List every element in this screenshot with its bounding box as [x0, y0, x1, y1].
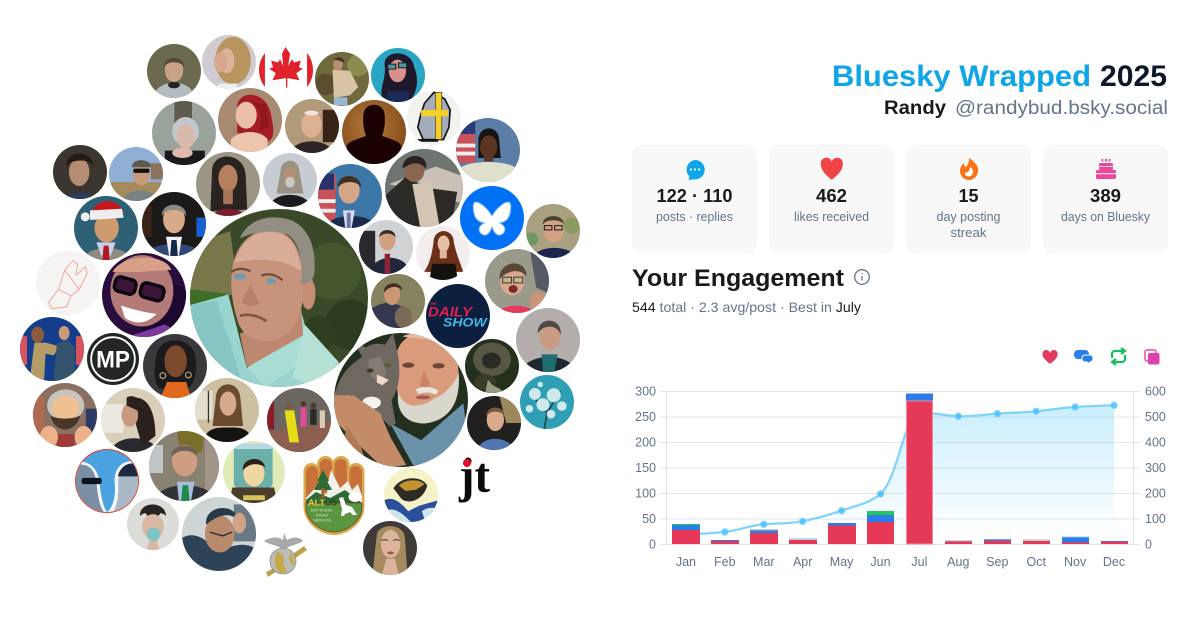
avatar: bald man: [285, 99, 339, 153]
stat card: likes received: [769, 145, 894, 253]
avatar: woman with auburn hair: [416, 226, 470, 280]
left axis labels: 50: [642, 512, 656, 526]
icon: Marine Corps emblem: [264, 533, 307, 577]
right axis labels: 300: [1145, 461, 1166, 475]
month labels: [676, 555, 1125, 569]
avatar: man in dark photo: [53, 145, 107, 199]
stacked bars: [672, 394, 1128, 544]
icon: info: [855, 270, 869, 284]
avatar: man in blue shirt: [467, 396, 521, 450]
avatar: Randy selfie, largest circle: [190, 209, 375, 387]
cumulative points: [722, 402, 1117, 535]
avatar: woman with dark hair: [196, 152, 260, 216]
icon: heart: [821, 158, 843, 180]
avatar: The Daily Show logo: THE: [429, 302, 437, 306]
avatar: woman with glasses in profile: [101, 388, 165, 452]
avatar: woman with bubble gum: [127, 498, 179, 550]
heading: Your Engagement: Your Engagement: [632, 265, 844, 292]
title: Bluesky Wrapped 2025: Bluesky Wrapped: [832, 60, 1091, 93]
month labels: Dec: [1103, 555, 1125, 569]
avatar: red line sketch on off-white: [36, 251, 100, 315]
avatar: blossoms on teal: [520, 375, 574, 429]
stat card: day posting streak: 15: [958, 185, 978, 206]
avatar: smiling man, purple tint: [102, 253, 186, 337]
avatar: Bluesky butterfly logo: [460, 186, 524, 250]
avatar: man in navy suit: [142, 192, 206, 256]
avatar: man hugging a cat: [334, 332, 468, 468]
right axis labels: 100: [1145, 512, 1166, 526]
stat card: posts and replies: [632, 145, 757, 253]
avatar: The Daily Show logo: SHOW: [443, 316, 489, 330]
avatar: MP logo: [87, 333, 139, 385]
user name and handle: [884, 98, 1168, 119]
month labels: Sep: [986, 555, 1008, 569]
avatar: man in grey hoodie: [147, 44, 201, 98]
avatar: cartoon head in jar: [223, 441, 285, 503]
avatar: Alt US National Park Service badge: NATIONAL: [311, 508, 333, 512]
cumulative line: [686, 405, 1114, 535]
stat card: days on Bluesky: 389: [1090, 185, 1121, 206]
left axis labels: 300: [635, 384, 656, 398]
avatar: two people shaking hands with flags: [20, 317, 84, 381]
avatar: Alt US National Park Service badge: SERVICE: [313, 518, 331, 522]
avatar: MP logo: MP: [96, 346, 130, 373]
avatar: grey-haired woman: [152, 101, 216, 167]
avatar: man in Santa hat: [74, 196, 138, 260]
avatar: silhouette on brown: [342, 100, 406, 164]
avatar: Canadian flag: [259, 47, 313, 88]
avatar: man in suit with flag: [318, 164, 382, 228]
avatar: man with hand on forehead: [182, 497, 256, 571]
avatar: man with dog: [371, 274, 425, 328]
right axis labels: 400: [1145, 436, 1166, 450]
month labels: Jan: [676, 555, 696, 569]
stat card: day posting streak: streak: [950, 226, 987, 240]
avatar: woman with long brown hair: [195, 378, 259, 442]
header: title and user: [832, 60, 1168, 119]
month labels: Oct: [1026, 555, 1046, 569]
right axis labels: [1145, 384, 1166, 552]
avatar: smiling man with glasses: [525, 204, 580, 258]
stat card: posts and replies: 122 · 110: [656, 185, 732, 206]
avatar: woman with long blonde hair: [363, 521, 417, 575]
right axis labels: 200: [1145, 486, 1166, 500]
stat card: day posting streak: day posting: [936, 210, 1001, 224]
icon: replies: [1074, 350, 1093, 364]
stat card: day posting streak: [906, 145, 1031, 253]
chart: monthly engagement: [635, 384, 1166, 569]
icon: likes: [1042, 350, 1058, 364]
left axis labels: 250: [635, 410, 656, 424]
avatar: man reclining in jacket: [385, 149, 463, 227]
stat card: days on Bluesky: [1043, 145, 1168, 253]
left axis labels: 150: [635, 461, 656, 475]
avatar: Alt US National Park Service badge: US: [325, 498, 338, 508]
avatar: The Daily Show logo: [426, 284, 490, 348]
avatar: older man with green tie: [149, 431, 219, 501]
icon: cake: [1096, 159, 1116, 179]
left axis labels: 200: [635, 436, 656, 450]
avatar: man in suit with red tie: [359, 220, 413, 274]
icon: flame: [960, 158, 978, 180]
month labels: Mar: [753, 555, 775, 569]
left axis labels: [635, 384, 656, 552]
month labels: Jul: [911, 555, 927, 569]
user name and handle: @randybud.bsky.social: [955, 98, 1168, 119]
icon: reposts: [1112, 348, 1125, 365]
avatar: Alt US National Park Service badge: [304, 456, 364, 535]
cumulative area: [686, 405, 1114, 535]
logo: jt: jt: [458, 447, 490, 503]
month labels: May: [830, 555, 854, 569]
avatar: The Daily Show logo: DAILY: [428, 304, 474, 320]
right axis labels: 0: [1145, 538, 1152, 552]
month labels: Apr: [793, 555, 812, 569]
avatar: man in dark jacket: [516, 308, 580, 372]
icon: chat bubble: [687, 160, 705, 180]
panel: avatar cloud: [20, 35, 580, 577]
stat card: posts and replies: posts · replies: [656, 210, 733, 224]
left axis labels: 0: [649, 538, 656, 552]
avatar: two men, blue background, red ring: [75, 449, 139, 513]
avatar: monkey: [465, 339, 519, 393]
stat card: likes received: likes received: [794, 210, 869, 224]
avatar: man with long grey hair: [263, 153, 317, 207]
avatar: woman with red hair: [218, 88, 282, 155]
icon: quotes: [1145, 350, 1160, 364]
avatar: man in cap and sunglasses: [109, 147, 163, 201]
avatar: woman with wavy great-wave turtle placeholder: [384, 468, 438, 522]
chart legend icons: [1042, 348, 1160, 365]
avatar: mitre with cross: [407, 91, 461, 145]
avatar: woman with US flag: [456, 118, 520, 185]
title: Bluesky Wrapped 2025: 2025: [1100, 60, 1167, 93]
avatar: bearded mascot: [33, 383, 97, 448]
avatar: man standing outdoors: [315, 52, 369, 106]
stat card: days on Bluesky: days on Bluesky: [1061, 210, 1151, 224]
avatar: Alt US National Park Service badge: ALT: [308, 498, 325, 508]
engagement summary: 544 total · 2.3 avg/post · Best in July: [632, 299, 861, 315]
avatar: woman with orange collar: [143, 334, 207, 398]
avatar: Alt US National Park Service badge: PARK: [316, 514, 328, 518]
month labels: Feb: [714, 555, 736, 569]
month labels: Nov: [1064, 555, 1087, 569]
month labels: Jun: [870, 555, 891, 569]
month labels: Aug: [947, 555, 969, 569]
left axis labels: 100: [635, 486, 656, 500]
avatar: woman in car waving: [485, 249, 549, 313]
user name and handle: Randy: [884, 98, 946, 119]
stat card: likes received: 462: [816, 185, 847, 206]
avatar: women in colourful dresses: [267, 388, 331, 452]
right axis labels: 600: [1145, 384, 1166, 398]
avatar: cartoon woman on teal: [371, 48, 425, 102]
right axis labels: 500: [1145, 410, 1166, 424]
avatar: blonde woman covering face: [202, 35, 256, 90]
